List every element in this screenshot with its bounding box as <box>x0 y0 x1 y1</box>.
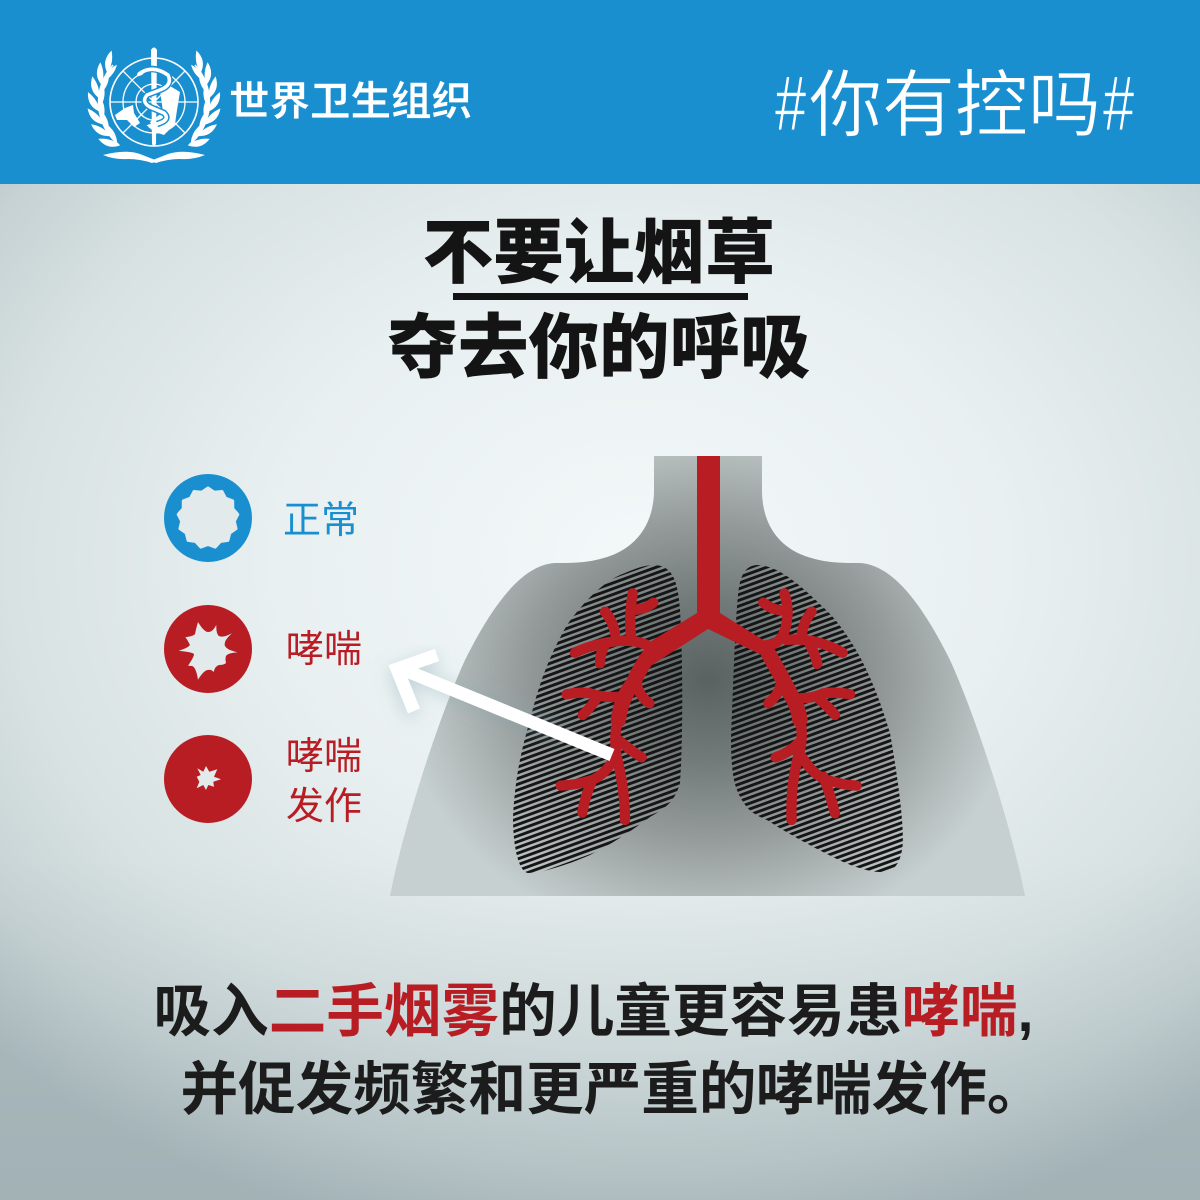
right bronchi <box>763 593 857 820</box>
left lung <box>513 565 682 873</box>
torso silhouette <box>390 456 1025 896</box>
label: asthma attack <box>286 736 362 828</box>
hashtag: # <box>1103 59 1134 147</box>
hashtag: 你有控吗 <box>809 65 1101 146</box>
label: asthma: 哮喘 <box>286 629 362 671</box>
title rule <box>453 293 748 300</box>
left bronchi <box>561 593 653 820</box>
title line 2: 夺去你的呼吸 <box>388 308 810 387</box>
header band <box>0 0 1200 184</box>
organisation name: 世界卫生组织 <box>229 78 472 124</box>
title <box>388 213 810 387</box>
caption line 2: 并促发频繁和更严重的哮喘发作。 <box>180 1058 1044 1122</box>
legend: asthma airway <box>164 605 252 693</box>
bottom caption <box>154 980 1044 1122</box>
icon: WHO emblem <box>88 48 220 163</box>
legend: asthma attack airway <box>164 735 252 823</box>
airway tree <box>561 456 857 820</box>
right lung <box>731 565 903 872</box>
trachea <box>648 456 772 667</box>
caption line 1: 吸入二手烟雾的儿童更容易患哮喘, <box>154 980 1033 1044</box>
hashtag: # <box>775 59 806 147</box>
legend <box>164 474 362 828</box>
legend: normal airway <box>164 474 252 562</box>
title line 1: 不要让烟草 <box>423 213 775 292</box>
label: normal: 正常 <box>283 500 359 542</box>
label: asthma attack: 发作 <box>286 786 362 828</box>
label: asthma attack: 哮喘 <box>286 736 362 778</box>
arrow <box>397 655 612 755</box>
